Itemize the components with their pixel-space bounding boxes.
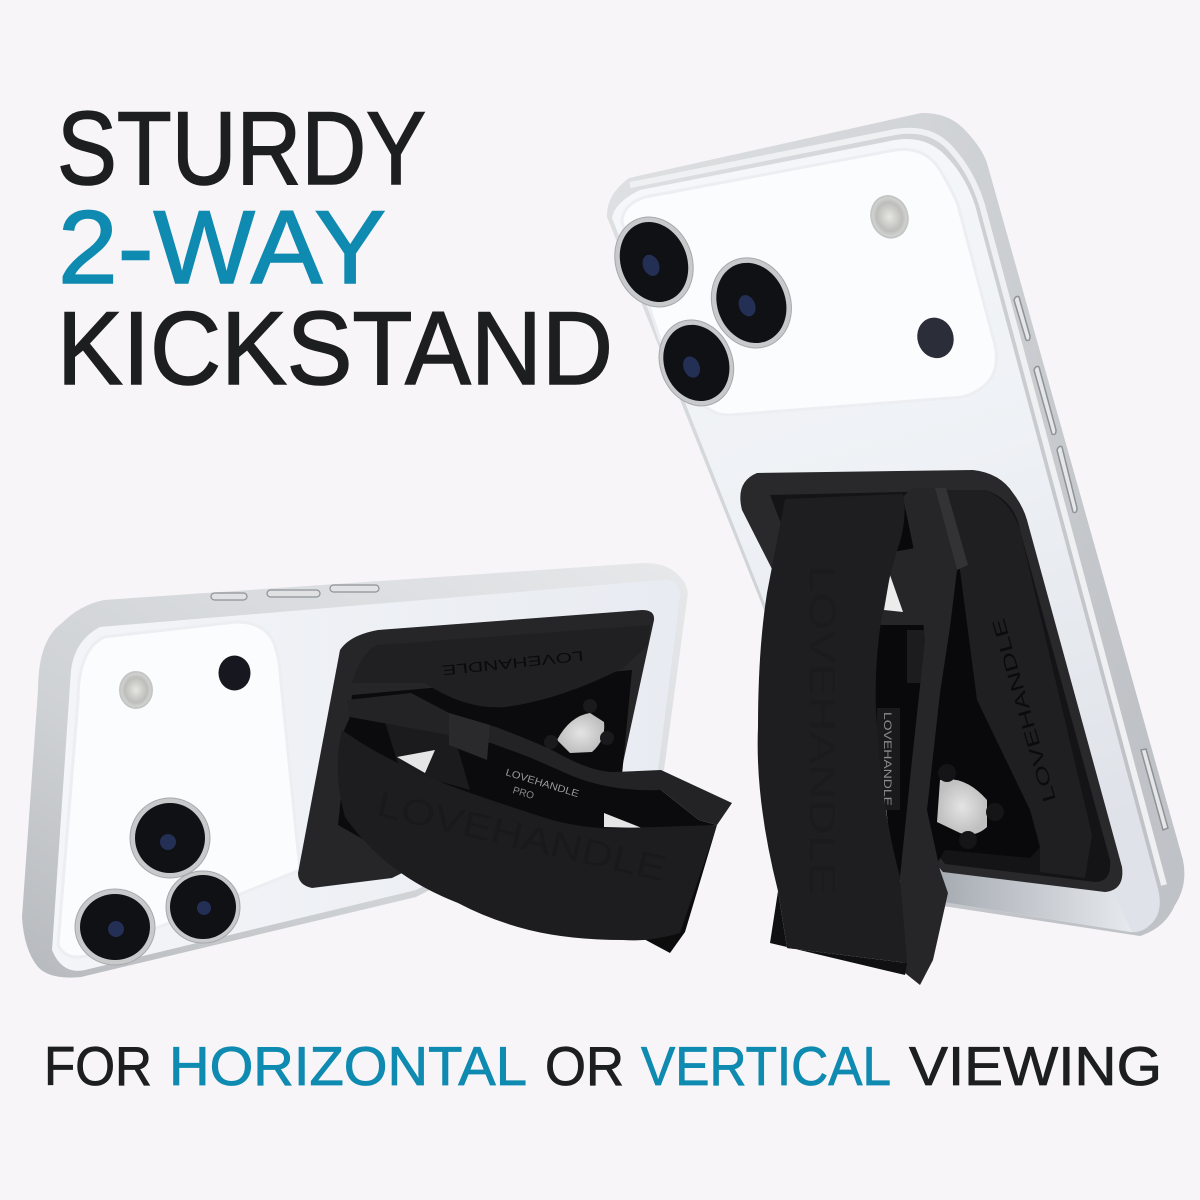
- strap text: LOVEHANDLE: [373, 783, 670, 889]
- phone back: [612, 139, 1160, 932]
- vertical phone: [602, 113, 1184, 985]
- kickstand base plate: [740, 470, 1122, 892]
- flash: [866, 191, 913, 242]
- hinge plate: [385, 722, 470, 790]
- title: KICKSTAND: [57, 291, 613, 407]
- camera plateau: [58, 622, 300, 957]
- inner label: LOVEHANDLE: [881, 712, 893, 806]
- frame highlight: [630, 131, 1164, 885]
- plate recess: [770, 490, 1110, 882]
- upper panel: [352, 625, 650, 707]
- strap: [338, 730, 717, 940]
- title: [57, 91, 613, 407]
- interior behind strap: [342, 717, 717, 832]
- inner label: LOVEHANDLE: [504, 767, 580, 800]
- plate brand: LOVEHANDLE: [988, 616, 1060, 804]
- flash: [120, 672, 152, 708]
- plate brand: LOVEHANDLE: [441, 648, 584, 679]
- inner label: [877, 708, 900, 810]
- strap foot: [642, 825, 717, 953]
- latch: [907, 630, 940, 683]
- side buttons: [1014, 296, 1168, 830]
- caption: VIEWING: [909, 1035, 1162, 1097]
- camera plateau: [622, 149, 996, 415]
- strap fold: [347, 693, 732, 825]
- lower shading: [935, 868, 1132, 932]
- title: STURDY: [57, 91, 426, 207]
- strap text: LOVEHANDLE: [802, 565, 843, 895]
- phone frame: [607, 113, 1184, 936]
- caption: [44, 1035, 1162, 1097]
- window bumps: [544, 699, 614, 749]
- camera lenses: [602, 205, 805, 417]
- sensor: [912, 313, 959, 363]
- strap latch: [449, 713, 490, 760]
- inner mechanism: [338, 670, 660, 860]
- second hinge rib: [935, 488, 968, 570]
- caption: FOR: [44, 1035, 152, 1097]
- curved panel: [938, 490, 1092, 878]
- kickstand base plate: [298, 610, 654, 888]
- side buttons: [211, 585, 379, 600]
- camera lenses: [75, 798, 240, 965]
- metal triangle: [884, 575, 903, 612]
- sensor: [218, 656, 250, 690]
- horizontal phone: [22, 563, 732, 978]
- window bumps: [938, 764, 1004, 849]
- black mechanism area: [875, 490, 1040, 880]
- metal window: [557, 713, 604, 753]
- phone back: [52, 580, 680, 971]
- phone frame: [22, 563, 688, 978]
- caption: VERTICAL: [641, 1035, 891, 1097]
- metal window: [937, 779, 987, 835]
- metal pieces: [397, 750, 642, 828]
- hinge plate: [880, 548, 930, 625]
- strap: [758, 494, 907, 963]
- caption: HORIZONTAL: [169, 1035, 527, 1097]
- caption: OR: [545, 1035, 624, 1097]
- inner label: [500, 767, 580, 815]
- strap foot: [770, 891, 907, 975]
- inner label: PRO: [511, 785, 535, 802]
- strap fold: [900, 488, 957, 985]
- title: 2-WAY: [58, 190, 386, 306]
